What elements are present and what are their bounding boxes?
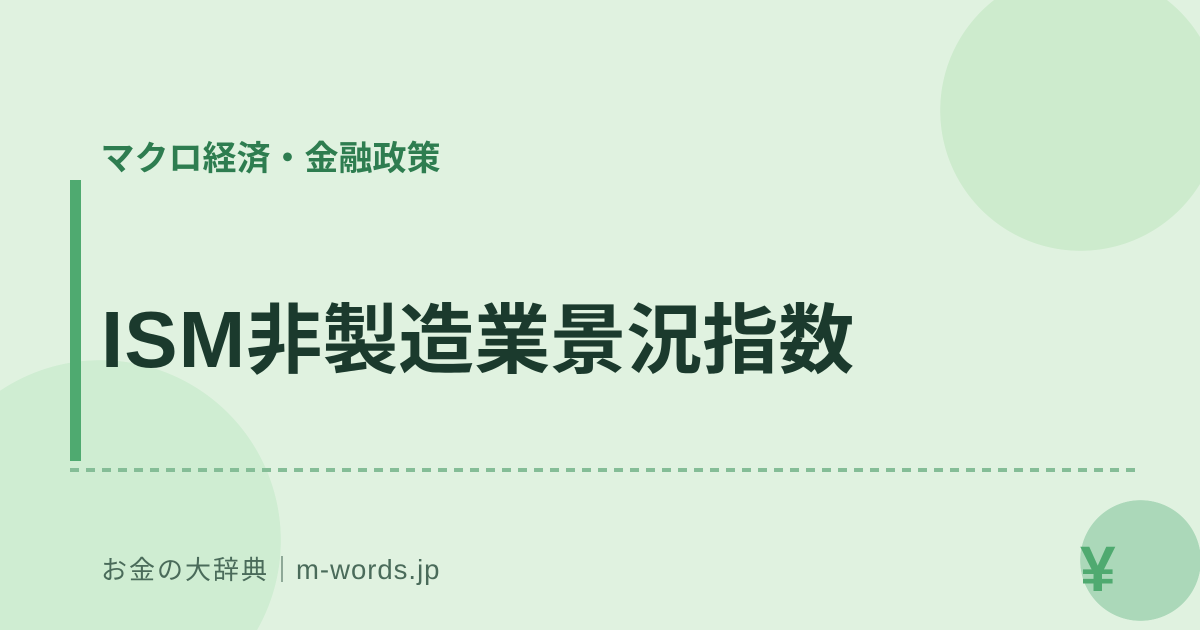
dashed divider — [70, 468, 1135, 472]
decorative circle: bottom right — [1080, 500, 1200, 621]
site credit: お金の大辞典｜m-words.jp — [101, 554, 440, 585]
decorative circle: bottom left — [0, 360, 282, 630]
category label: マクロ経済・金融政策 — [100, 140, 440, 178]
title: ISM非製造業景況指数 — [101, 295, 854, 384]
decorative circle: top right — [940, 0, 1200, 252]
accent bar — [70, 180, 81, 461]
icon: yen symbol: ¥ — [1080, 533, 1116, 605]
